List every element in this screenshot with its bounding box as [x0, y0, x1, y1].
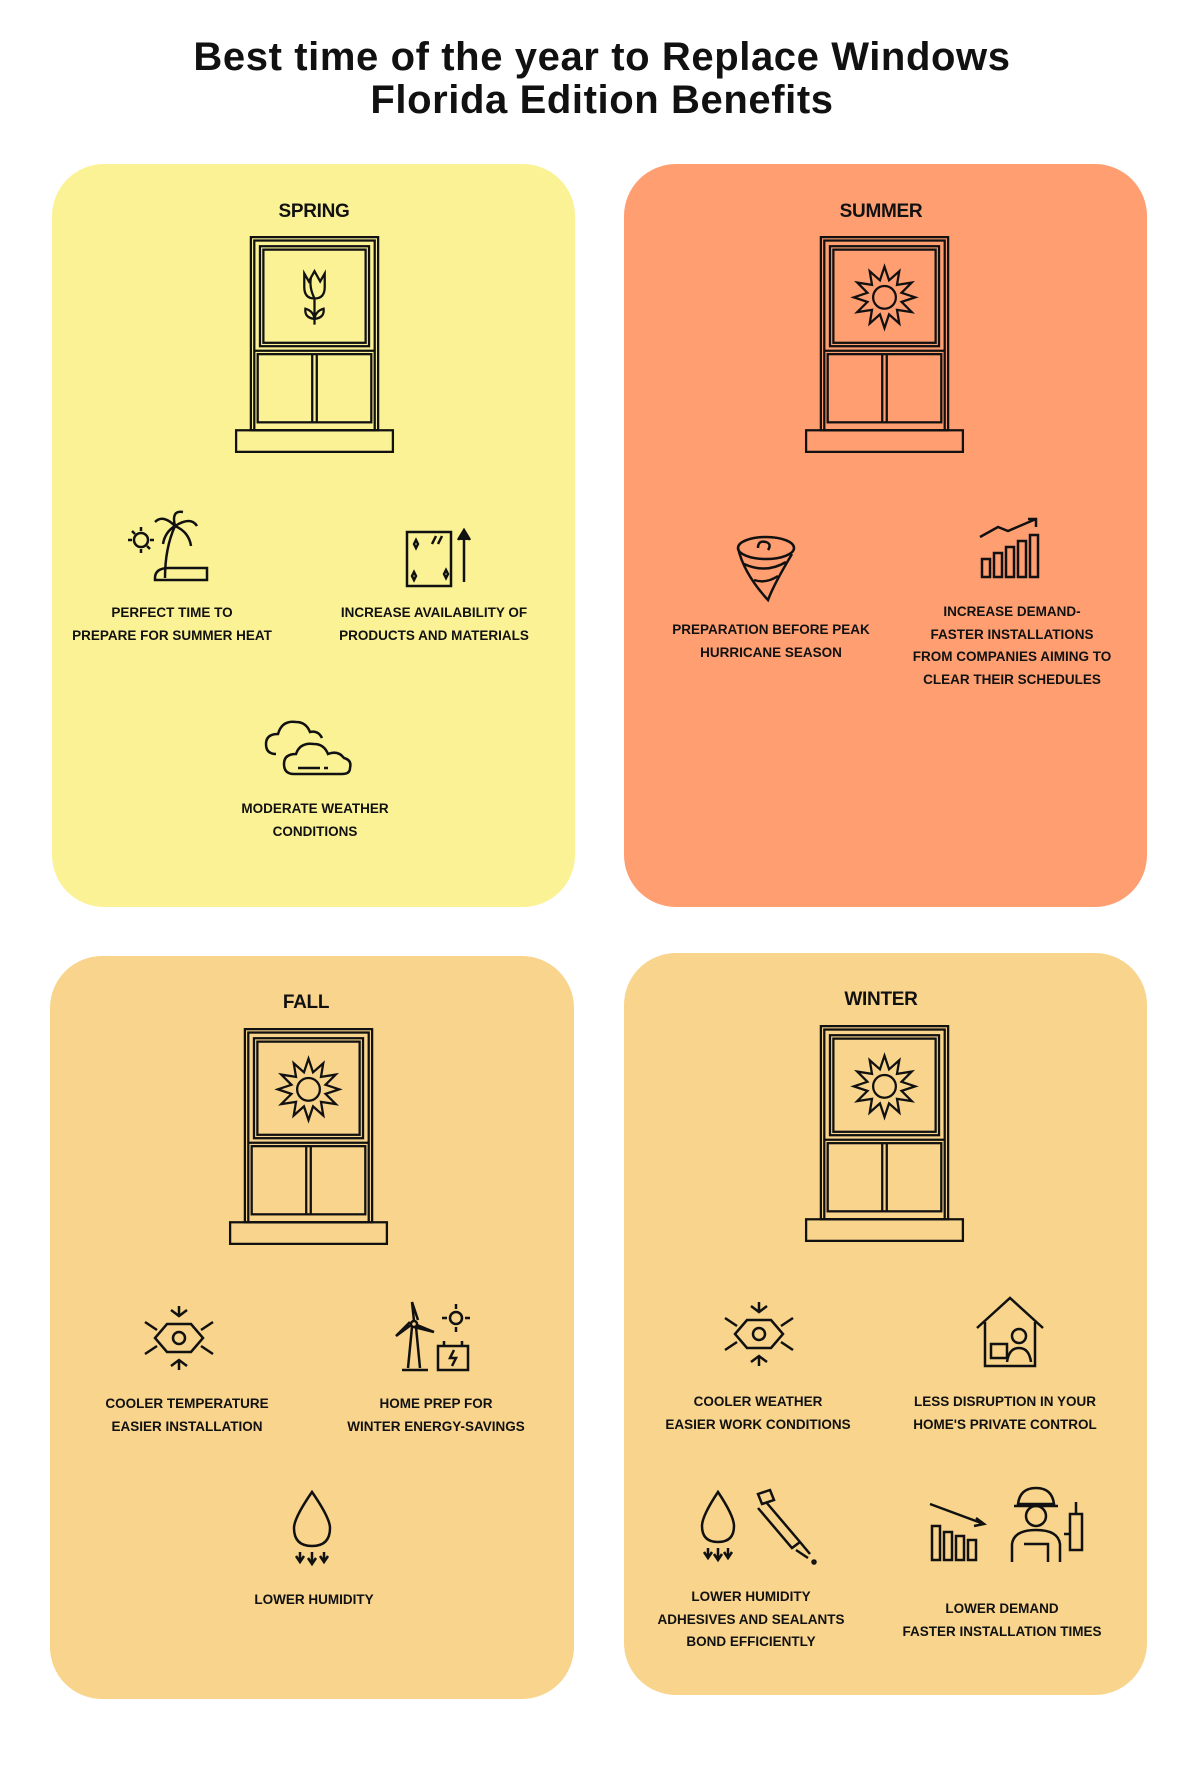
text: fall 3: LOWER HUMIDITY [254, 1592, 374, 1607]
panel: fall [50, 956, 574, 1699]
text: winter 4: FASTER INSTALLATION TIMES [902, 1624, 1102, 1638]
text: winter 3: BOND EFFICIENTLY [686, 1634, 816, 1649]
text: winter 2: LESS DISRUPTION IN YOUR [914, 1394, 1096, 1409]
text: winter 2: HOME'S PRIVATE CONTROL [913, 1416, 1097, 1432]
text: summer 2 [913, 604, 1111, 686]
window: fall [228, 1028, 388, 1245]
title: Florida Edition Benefits [370, 78, 834, 122]
icon: snowflake hex (fall) [144, 1306, 214, 1370]
text: fall 2 [347, 1396, 525, 1434]
icon: clouds [264, 720, 352, 776]
text: winter 2 [913, 1394, 1097, 1432]
window: winter [804, 1025, 964, 1242]
heading: spring: SPRING [278, 201, 350, 222]
text: spring 3: MODERATE WEATHER [241, 801, 389, 816]
text: spring 1 [72, 605, 272, 642]
text: winter 3 [657, 1589, 845, 1649]
heading: winter: WINTER [844, 989, 918, 1010]
text: winter 1: COOLER WEATHER [694, 1394, 822, 1409]
icon: palm beach [128, 510, 208, 582]
panel: summer [624, 164, 1147, 907]
panel: spring [52, 164, 575, 907]
window: summer with sun [804, 236, 964, 453]
text: spring 1: PERFECT TIME TO [111, 605, 233, 620]
text: spring 2: PRODUCTS AND MATERIALS [339, 628, 529, 642]
text: summer 2: FASTER INSTALLATIONS [930, 626, 1094, 642]
icon: windmill energy [395, 1302, 470, 1372]
panel: winter [624, 953, 1147, 1695]
icon: snowflake hex (winter) [724, 1302, 794, 1366]
text: winter 4: LOWER DEMAND [945, 1601, 1059, 1616]
text: winter 1 [665, 1394, 851, 1432]
text: winter 3: LOWER HUMIDITY [691, 1589, 811, 1604]
text: fall 1: COOLER TEMPERATURE [105, 1396, 269, 1411]
text: winter 1: EASIER WORK CONDITIONS [665, 1416, 851, 1432]
text: summer 2: INCREASE DEMAND- [943, 604, 1081, 619]
text: fall 2: HOME PREP FOR [379, 1396, 493, 1411]
text: summer 2: FROM COMPANIES AIMING TO [913, 649, 1111, 664]
text: spring 1: PREPARE FOR SUMMER HEAT [72, 628, 272, 642]
text: fall 2: WINTER ENERGY-SAVINGS [347, 1418, 525, 1434]
text: spring 2 [339, 605, 529, 642]
text: winter 3: ADHESIVES AND SEALANTS [657, 1612, 845, 1626]
text: fall 1 [105, 1396, 269, 1434]
text: winter 4 [902, 1601, 1102, 1638]
icon: glass availability [406, 528, 471, 588]
window: spring with tulip [234, 236, 394, 453]
heading: summer: SUMMER [840, 201, 922, 222]
icon: rising chart [979, 518, 1040, 578]
icon: house with person [976, 1296, 1044, 1368]
icon: falling chart and worker [930, 1486, 1084, 1562]
title: Best time of the year to Replace Windows [193, 35, 1011, 79]
heading: fall: FALL [283, 992, 329, 1013]
icon: drop down (fall) [292, 1490, 332, 1566]
text: summer 1: PREPARATION BEFORE PEAK [672, 622, 870, 637]
text: spring 3: CONDITIONS [273, 824, 357, 838]
text: summer 2: CLEAR THEIR SCHEDULES [923, 672, 1101, 686]
text: summer 1: HURRICANE SEASON [700, 644, 842, 660]
text: fall 1: EASIER INSTALLATION [112, 1418, 262, 1434]
text: summer 1 [672, 622, 870, 660]
title [193, 35, 1011, 122]
text: spring 3 [241, 801, 389, 838]
icon: drop and sealant gun [700, 1488, 817, 1565]
text: spring 2: INCREASE AVAILABILITY OF [341, 605, 527, 620]
icon: tornado [736, 536, 796, 602]
